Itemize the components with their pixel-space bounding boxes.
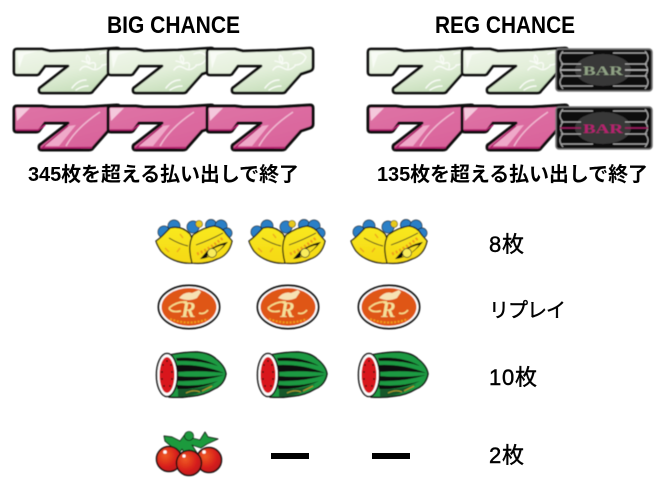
icons: replay row: [158, 286, 420, 328]
label: 2枚: 2枚: [489, 443, 524, 468]
text: BIG CHANCE end condition: 345枚を超える払い出しで終了: [28, 163, 299, 186]
panel: BIG CHANCE pink sevens: [14, 105, 313, 150]
text: REG CHANCE end condition: 135枚を超える払い出しで終了: [377, 163, 648, 186]
heading: REG CHANCE: REG CHANCE: [435, 12, 575, 39]
panel: REG CHANCE white sevens and BAR: [368, 48, 652, 93]
icon: dash: [372, 453, 410, 459]
label: リプレイ: リプレイ: [489, 300, 566, 322]
icon: cherry: [156, 432, 222, 476]
panel: BIG CHANCE white sevens: [14, 48, 313, 93]
label: 8枚: 8枚: [489, 232, 524, 257]
icons: bell row: [156, 220, 427, 263]
icons: watermelon row: [156, 352, 428, 397]
heading: BIG CHANCE: BIG CHANCE: [107, 12, 240, 39]
icon: dash: [271, 453, 309, 459]
panel: REG CHANCE pink sevens and BAR: [368, 105, 652, 150]
label: 10枚: 10枚: [489, 365, 537, 390]
